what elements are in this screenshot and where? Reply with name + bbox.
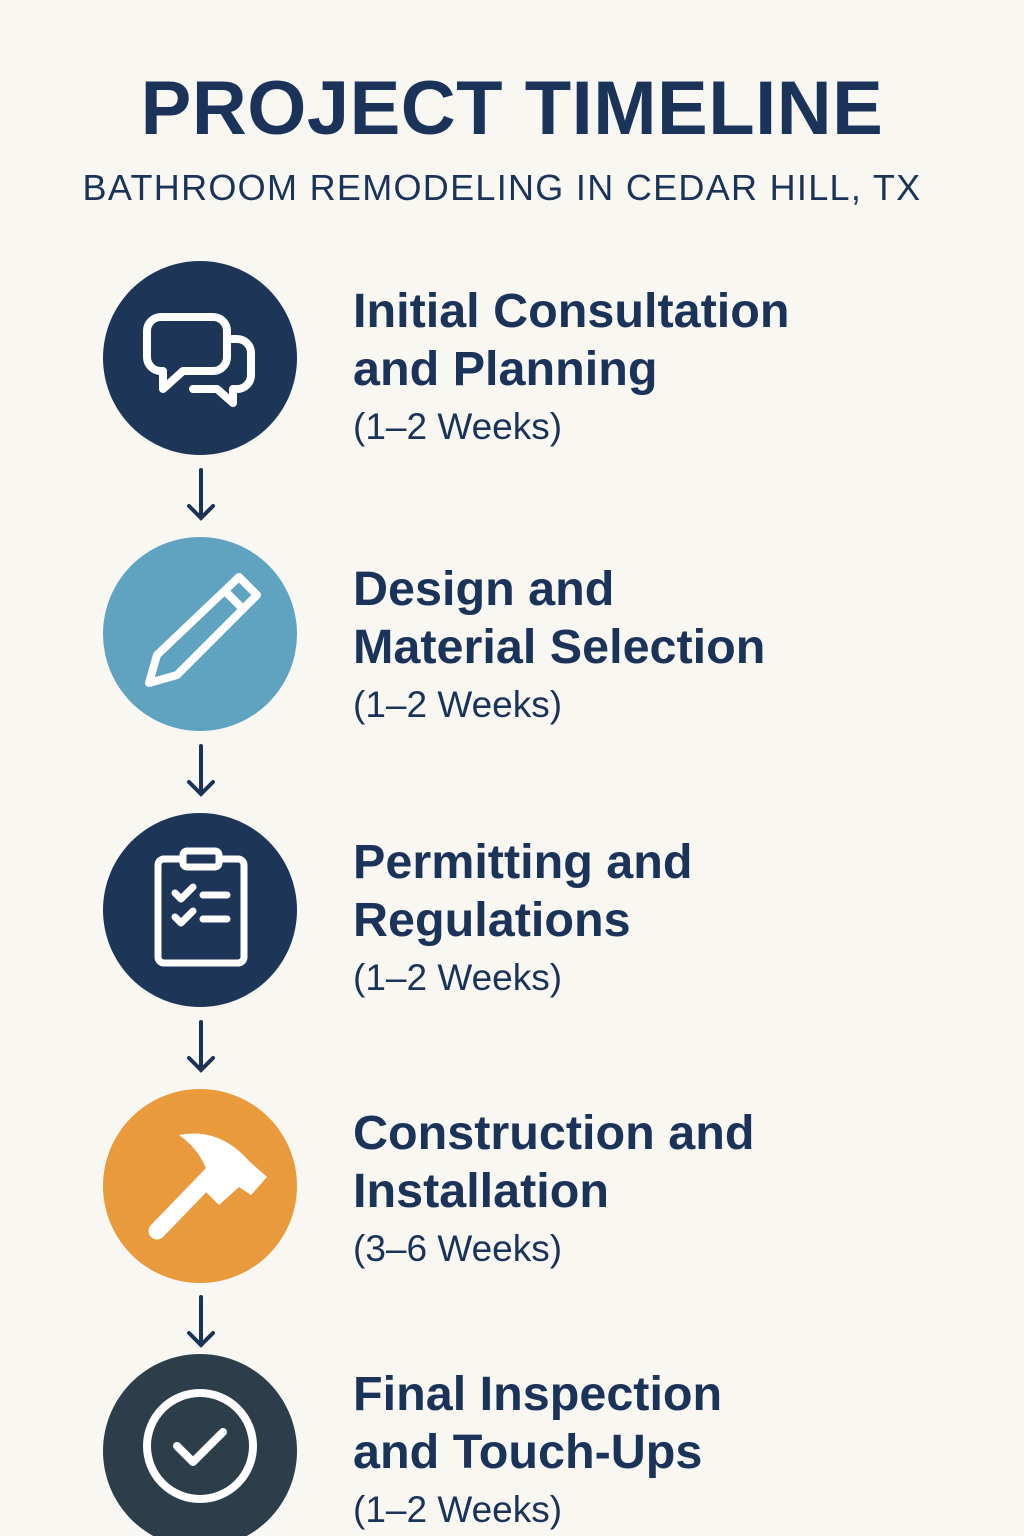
- step 1 text: (1–2 Weeks): [353, 406, 562, 447]
- step 5 text: (1–2 Weeks): [353, 1489, 562, 1530]
- arrow 1: [186, 468, 216, 521]
- step 2 text: Design and: [353, 562, 614, 616]
- title: PROJECT TIMELINE: [141, 66, 883, 151]
- step 5 text: [353, 1367, 722, 1530]
- step 3 text: [353, 835, 693, 998]
- arrow 2: [186, 744, 216, 797]
- step 1 icon: chat bubbles: [103, 261, 297, 455]
- step 3 text: Regulations: [353, 893, 631, 947]
- step 5 text: and Touch-Ups: [353, 1425, 702, 1479]
- step 1 text: and Planning: [353, 342, 657, 396]
- step 3 icon: clipboard: [103, 813, 297, 1007]
- step 2 text: (1–2 Weeks): [353, 684, 562, 725]
- step 5 text: Final Inspection: [353, 1367, 722, 1421]
- step 1 text: Initial Consultation: [353, 284, 789, 338]
- arrow 3: [186, 1020, 216, 1073]
- step 1 text: [353, 284, 789, 447]
- step 2 text: Material Selection: [353, 620, 765, 674]
- step 2 icon: pencil: [103, 537, 297, 731]
- subtitle: BATHROOM REMODELING IN CEDAR HILL, TX: [83, 167, 921, 208]
- step 3 text: (1–2 Weeks): [353, 957, 562, 998]
- step 4 icon: hammer: [103, 1089, 297, 1283]
- step 3 text: Permitting and: [353, 835, 693, 889]
- step 2 text: [353, 562, 765, 725]
- step 4 text: (3–6 Weeks): [353, 1228, 562, 1269]
- arrow 4: [186, 1295, 216, 1348]
- step 4 text: Construction and: [353, 1106, 754, 1160]
- step 4 text: Installation: [353, 1164, 609, 1218]
- step 5 icon: check circle: [103, 1354, 297, 1536]
- step 4 text: [353, 1106, 754, 1269]
